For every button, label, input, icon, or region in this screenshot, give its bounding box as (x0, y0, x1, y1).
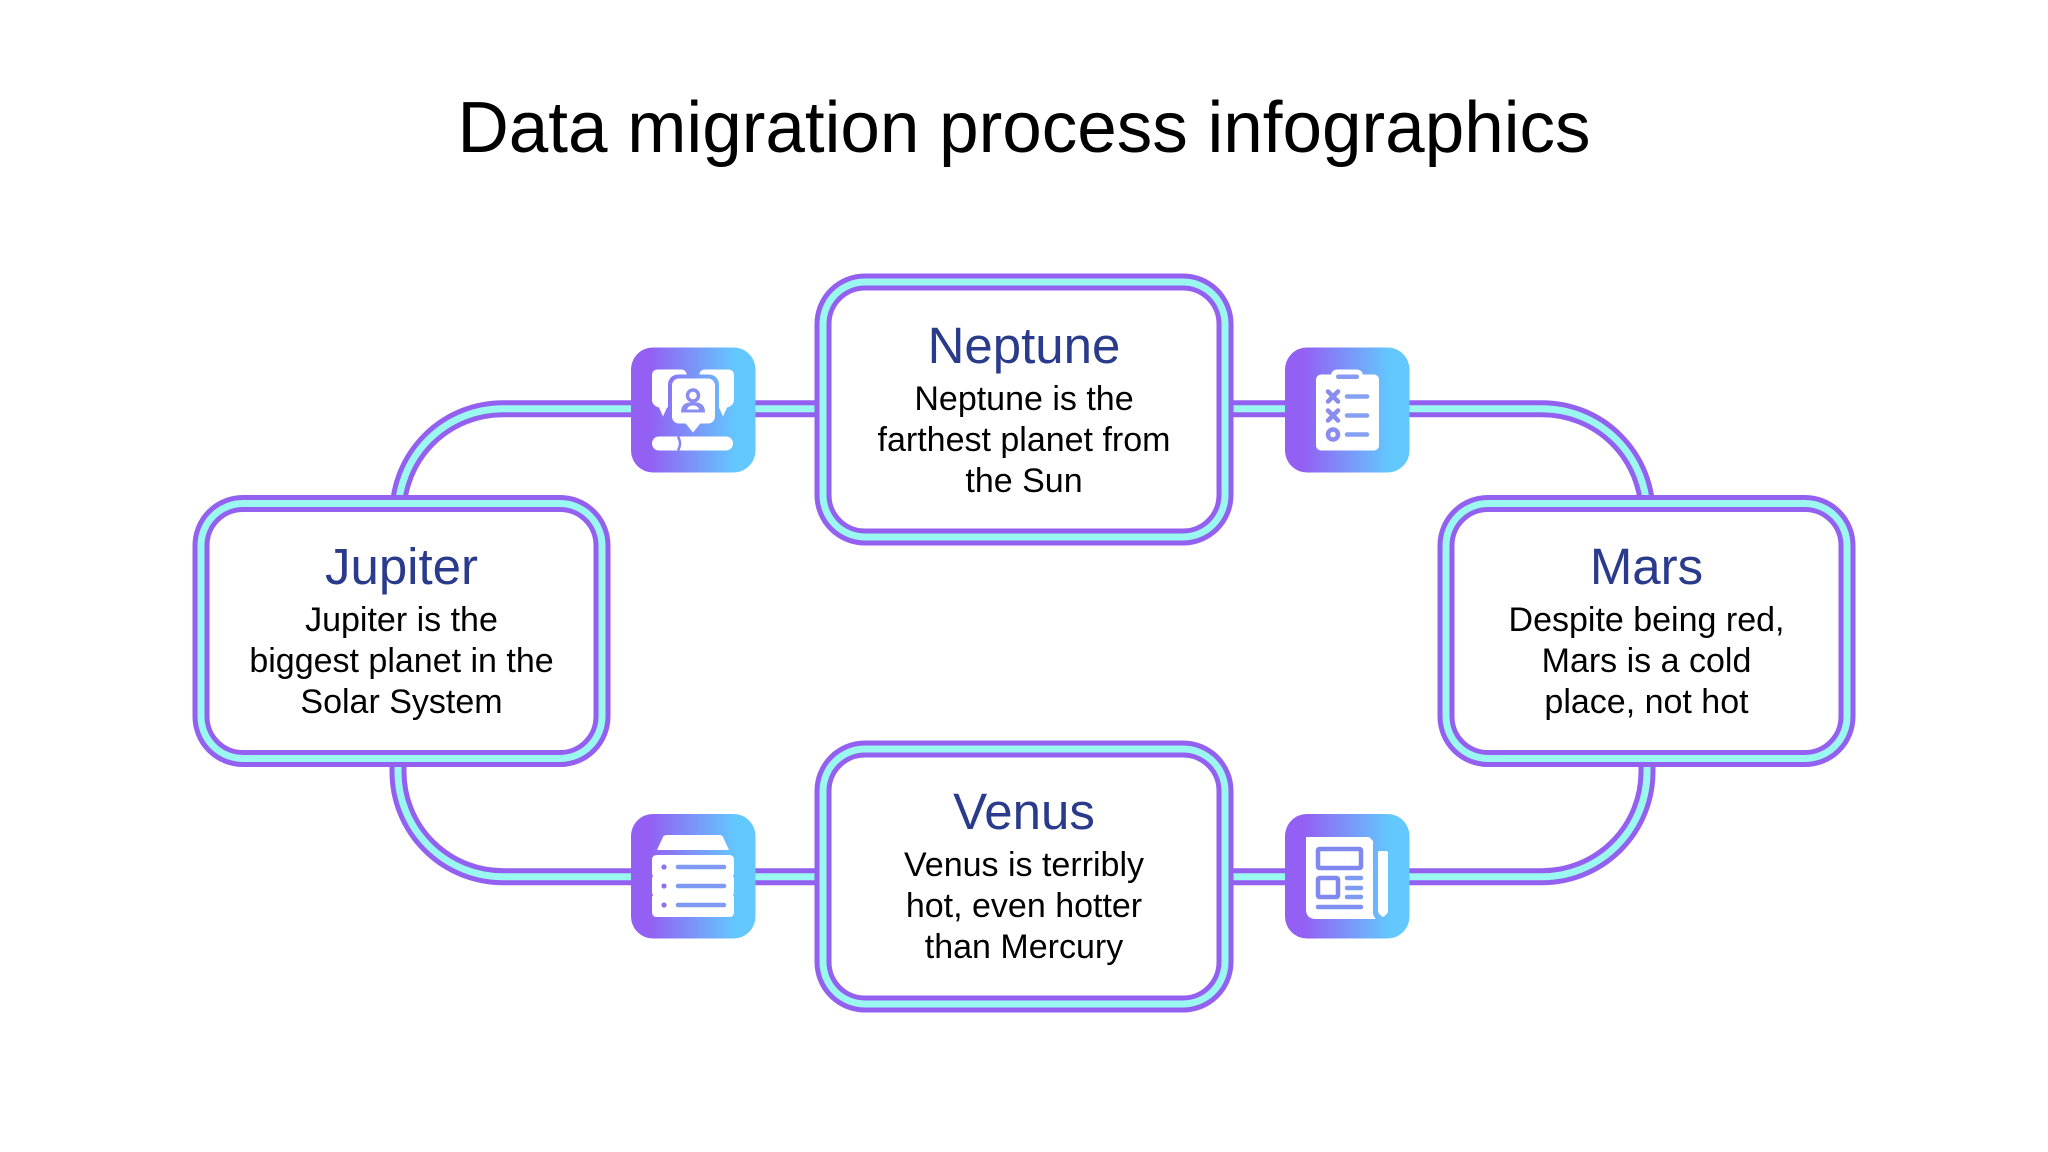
icon: profile chat bubbles (631, 348, 756, 472)
panel: Mars: Despite being red, (1509, 601, 1784, 639)
panel: Venus: Venus (953, 783, 1095, 840)
panel: Jupiter (201, 504, 602, 758)
panel: Venus: than Mercury (925, 928, 1123, 966)
connector: Venus to Mars (1208, 745, 1647, 877)
icon: clipboard checklist (1285, 348, 1410, 472)
panel: Venus (823, 749, 1225, 1004)
panel: Mars: Mars (1590, 538, 1703, 595)
panel: Neptune: Neptune (928, 317, 1120, 374)
panel: Jupiter: Solar System (300, 683, 503, 721)
panel: Venus: hot, even hotter (906, 887, 1142, 925)
panel: Jupiter: Jupiter (325, 538, 478, 595)
icon: server list (631, 814, 756, 938)
panel: Neptune: the Sun (965, 462, 1083, 500)
connector: Jupiter to Neptune (398, 409, 840, 520)
panel: Mars: place, not hot (1544, 683, 1749, 721)
connector: Neptune to Mars (1208, 409, 1647, 520)
panel: Jupiter: biggest planet in the (249, 642, 554, 680)
title: Data migration process infographics (458, 88, 1590, 168)
panel: Neptune: Neptune is the (914, 380, 1134, 418)
icon: newspaper (1285, 814, 1410, 938)
panel: Mars (1446, 504, 1847, 758)
panel: Mars: Mars is a cold (1542, 642, 1751, 680)
panel: Jupiter: Jupiter is the (305, 601, 498, 639)
panel: Venus: Venus is terribly (904, 846, 1144, 884)
panel: Neptune: farthest planet from (878, 421, 1170, 459)
panel: Neptune (823, 282, 1225, 537)
connector: Jupiter to Venus (398, 745, 840, 877)
